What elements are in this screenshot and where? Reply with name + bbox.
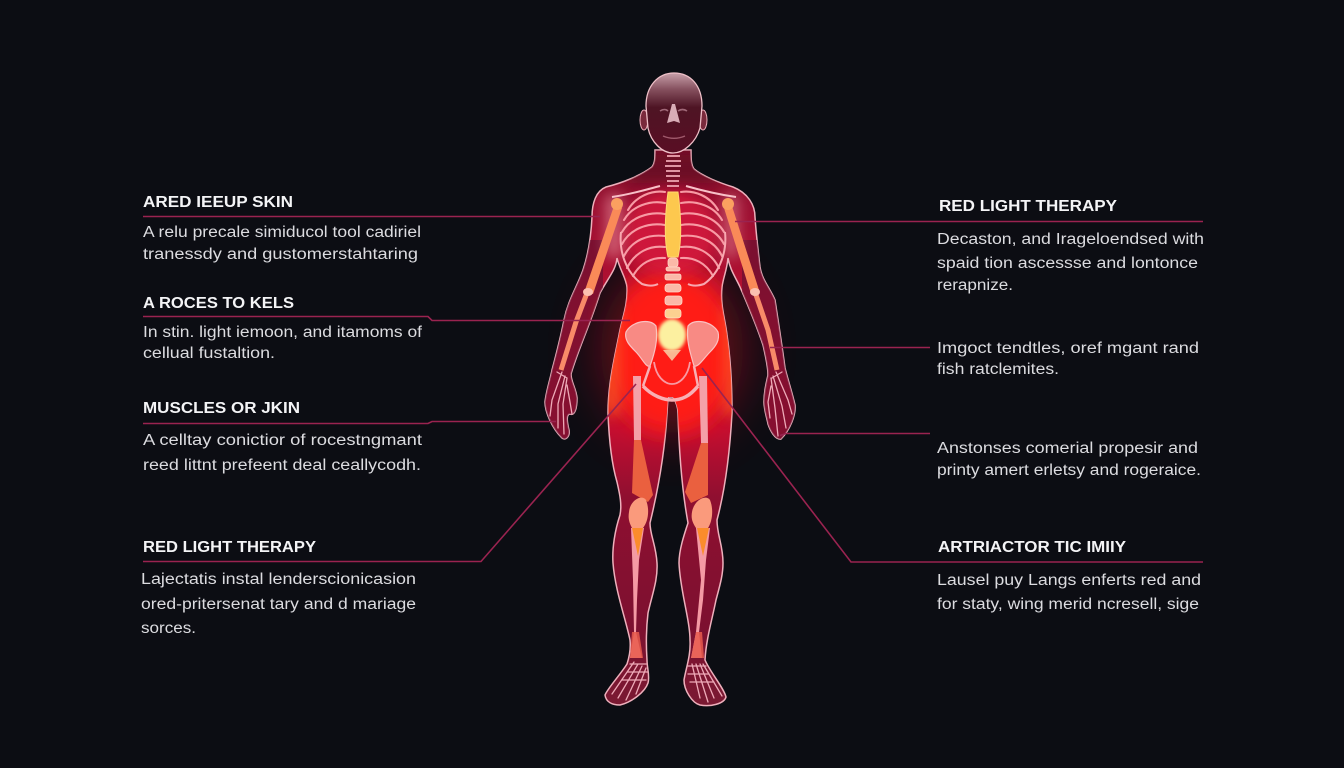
right callout 2: fish ratclemites.: [937, 361, 1059, 378]
right callout 1: [735, 198, 1204, 294]
right callout 4: ARTRIACTOR TIC IMIIY: [938, 539, 1127, 556]
left callout 3: MUSCLES OR JKIN: [143, 400, 300, 417]
left callout 3: A celltay conictior of rocestngmant: [143, 432, 423, 449]
hands: [550, 372, 792, 436]
left callout 2: In stin. light iemoon, and itamoms of: [143, 324, 423, 341]
right callout 1: rerapnize.: [937, 277, 1013, 294]
left callout 1: [143, 194, 600, 263]
left callout 2: [143, 295, 630, 362]
feet: [612, 662, 722, 702]
right callout 3: Anstonses comerial propesir and: [937, 440, 1198, 457]
human body figure: [535, 73, 802, 706]
arm bones: [561, 198, 777, 370]
collarbones: [612, 186, 736, 197]
left callout 1: tranessdy and gustomerstahtaring: [143, 246, 418, 263]
head: [640, 73, 707, 153]
rib cage: [621, 192, 725, 286]
neck vertebrae: [665, 156, 681, 186]
left callout 1: ARED IEEUP SKIN: [143, 194, 293, 211]
left callout 3: reed littnt prefeent deal ceallycodh.: [143, 457, 421, 474]
right callout 3: [780, 434, 1201, 479]
body silhouette: [545, 150, 795, 706]
left callout 4: Lajectatis instal lenderscionicasion: [141, 571, 416, 588]
sternum: [665, 192, 681, 257]
red glow behind body: [600, 265, 744, 435]
left callout 2: cellual fustaltion.: [143, 345, 275, 362]
left callout 4: [141, 384, 636, 637]
right callout 4: for staty, wing merid ncresell, sige: [937, 596, 1199, 613]
right callout 2: [770, 340, 1199, 378]
left callout 2: A ROCES TO KELS: [143, 295, 294, 312]
right callout 1: RED LIGHT THERAPY: [939, 198, 1118, 215]
right callout 2: Imgoct tendtles, oref mgant rand: [937, 340, 1199, 357]
left callout 4: RED LIGHT THERAPY: [143, 539, 317, 556]
lumbar spine: [665, 258, 682, 318]
right callout 4: [702, 368, 1203, 613]
right callout 1: spaid tion ascessse and lontonce: [937, 255, 1198, 272]
left callout 3: [143, 400, 556, 474]
right callout 3: printy amert erletsy and rogeraice.: [937, 462, 1201, 479]
left callout 4: sorces.: [141, 620, 196, 637]
left callout 1: A relu precale simiducol tool cadiriel: [143, 224, 421, 241]
left callout 4: ored-pritersenat tary and d mariage: [141, 596, 416, 613]
leg bones: [629, 376, 712, 658]
right callout 1: Decaston, and Irageloendsed with: [937, 231, 1204, 248]
pelvis: [626, 319, 719, 400]
right callout 4: Lausel puy Langs enferts red and: [937, 572, 1201, 589]
bright torso and hip glow: [535, 155, 802, 445]
